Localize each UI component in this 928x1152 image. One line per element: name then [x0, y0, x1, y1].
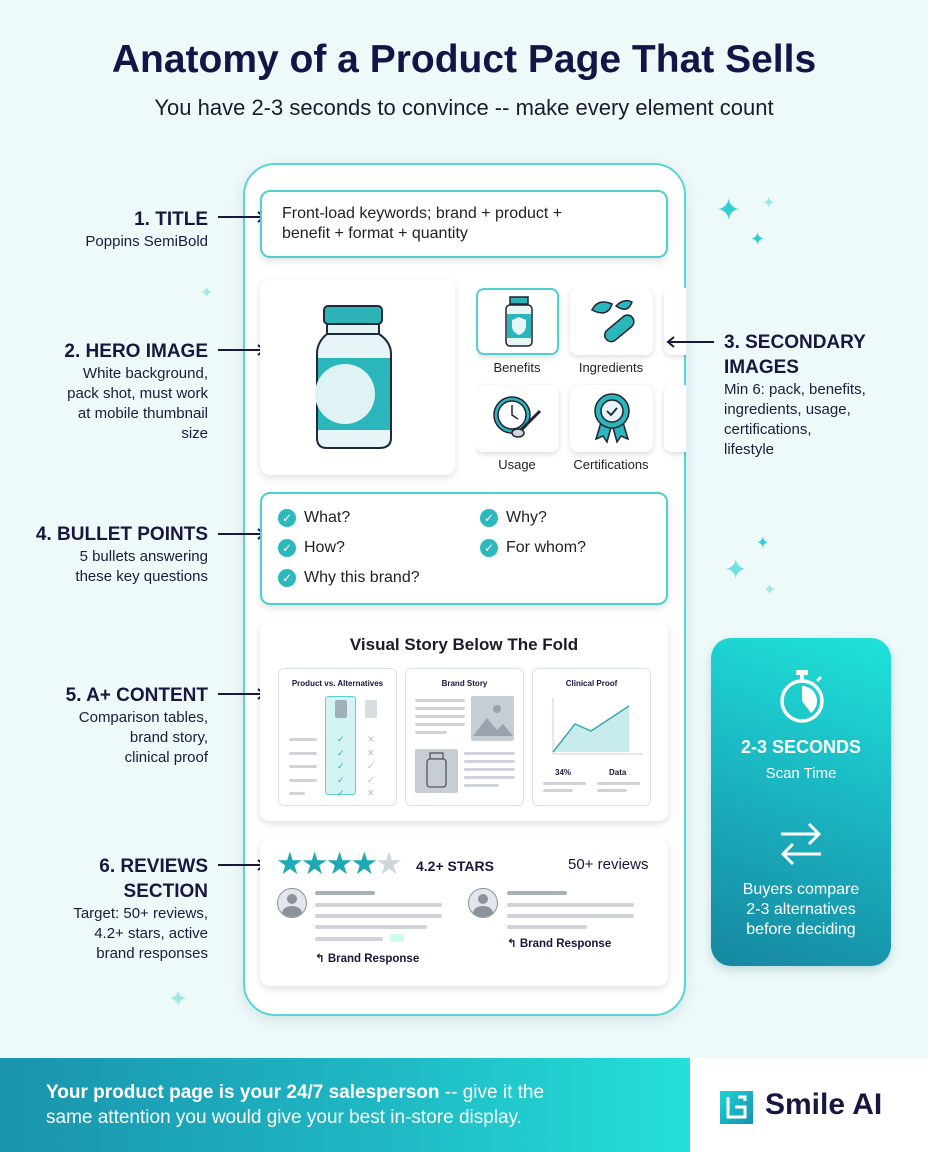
text: ✦: [756, 535, 769, 552]
subcard: clinical proof: 34%: [555, 768, 571, 777]
label: 1. title: 1. TITLE: [134, 209, 208, 230]
subcard: comparison: ✓: [337, 734, 345, 744]
label: 6. reviews: brand responses: [96, 945, 208, 962]
subcard: comparison: ✕: [367, 788, 375, 798]
bullets card: ✓: [282, 571, 292, 585]
label: 2. hero image: White background,: [83, 365, 208, 382]
label: 4. bullet points: 5 bullets answering: [80, 548, 208, 565]
thumb: benefits: [476, 288, 559, 355]
text: ✦: [168, 986, 188, 1013]
subcard: comparison: ✕: [367, 734, 375, 744]
subcard: clinical proof: Data: [609, 768, 626, 777]
title card: Front-load keywords; brand + product + benefit + format + quantity: [282, 205, 562, 242]
bullets card: ✓: [282, 541, 292, 555]
bullets card: ✓: [282, 511, 292, 525]
thumbnails: Ingredients: [579, 360, 643, 375]
footer banner: same attention you would give your best in-store display.: [46, 1107, 522, 1128]
subcard: comparison: ✓: [337, 774, 345, 784]
label: 5. A+ content: clinical proof: [125, 749, 208, 766]
subcard: comparison: ✓: [337, 788, 345, 798]
arrow: hero: [218, 344, 260, 356]
subcard: brand story: Brand Story: [442, 679, 487, 688]
footer banner: Your product page is your 24/7 salesperson -- give it the: [46, 1082, 544, 1103]
review 2: [468, 888, 498, 918]
label: 5. A+ content: Comparison tables,: [79, 709, 208, 726]
bullets card: How?: [304, 539, 345, 556]
text: ✦: [750, 229, 765, 249]
arrow: bullets: [218, 528, 260, 540]
title: Anatomy of a Product Page That Sells: [112, 38, 816, 81]
subcard: comparison: Product vs. Alternatives: [292, 679, 383, 688]
review 1: [277, 888, 307, 918]
bullets card: Why this brand?: [304, 569, 420, 586]
subcard: comparison: ✓: [367, 761, 375, 771]
label: 3. secondary images: 3. SECONDARY: [724, 332, 866, 353]
stat box: Buyers compare: [743, 881, 859, 898]
subcard: clinical proof: Clinical Proof: [566, 679, 617, 688]
bullets card: ✓: [484, 511, 494, 525]
stat box: before deciding: [746, 921, 856, 938]
label: 2. hero image: 2. HERO IMAGE: [64, 341, 208, 362]
text: ✦: [724, 554, 747, 585]
label: 1. title: [85, 209, 208, 250]
logo: [690, 1058, 928, 1152]
arrow: title: [218, 211, 260, 223]
thumb: usage: [476, 385, 559, 452]
title card: [260, 190, 668, 258]
label: 6. reviews: 4.2+ stars, active: [94, 925, 208, 942]
label: 3. secondary images: Min 6: pack, benefits,: [724, 381, 866, 398]
reviews card: [260, 838, 668, 986]
bullets card: For whom?: [506, 539, 586, 556]
logo: Smile AI: [765, 1088, 882, 1121]
label: 5. A+ content: brand story,: [130, 729, 208, 746]
stat box: Scan Time: [766, 765, 836, 782]
label: 6. reviews: Target: 50+ reviews,: [73, 905, 208, 922]
label: 2. hero image: [64, 341, 208, 442]
text: ✦: [762, 195, 775, 212]
subcard: brand story: [405, 668, 524, 806]
label: 1. title: Poppins SemiBold: [85, 233, 208, 250]
label: 3. secondary images: [724, 332, 866, 458]
label: 4. bullet points: these key questions: [75, 568, 208, 585]
subcard: comparison: ✓: [337, 748, 345, 758]
label: 3. secondary images: certifications,: [724, 421, 812, 438]
reviews card: ↰ Brand Response: [507, 938, 611, 950]
decorative sparkles: ✦: [716, 194, 741, 227]
A+ card: Visual Story Below The Fold: [350, 635, 578, 654]
icon: stopwatch: [780, 670, 824, 723]
subtitle: You have 2-3 seconds to convince -- make every element count: [154, 95, 774, 120]
label: 2. hero image: at mobile thumbnail: [78, 405, 208, 422]
label: 2. hero image: pack shot, must work: [67, 385, 208, 402]
subcard: comparison: ✕: [367, 748, 375, 758]
arrow: A+: [218, 688, 260, 700]
stat box: [711, 638, 891, 966]
stat box: 2-3 SECONDS: [741, 737, 861, 757]
label: 3. secondary images: ingredients, usage,: [724, 401, 851, 418]
subcard: comparison: ✓: [337, 761, 345, 771]
label: 5. A+ content: [66, 685, 208, 766]
text: ✦: [200, 285, 213, 302]
stars: ★★★★★: [276, 846, 400, 881]
thumb: partial 2: [664, 385, 747, 452]
thumbnails: Usage: [498, 457, 536, 472]
subcard: comparison: [278, 668, 397, 806]
label: 6. reviews: [73, 856, 208, 962]
thumbnails: Certifications: [573, 457, 649, 472]
arrow: reviews: [218, 859, 260, 871]
reviews card: ↰ Brand Response: [315, 953, 419, 965]
label: 4. bullet points: [36, 524, 208, 585]
bullets card: [260, 492, 668, 605]
thumb: certifications: [570, 385, 653, 452]
bullets card: ✓: [484, 541, 494, 555]
bullets card: Why?: [506, 509, 547, 526]
reviews card: 50+ reviews: [568, 856, 648, 873]
subcard: comparison: ✓: [367, 774, 375, 784]
thumbnails: Benefits: [494, 360, 540, 375]
label: 6. reviews: SECTION: [124, 881, 208, 902]
stat box: 2-3 alternatives: [746, 901, 856, 918]
label: 3. secondary images: lifestyle: [724, 441, 774, 458]
A+ card: [260, 621, 668, 821]
thumb: partial: [664, 288, 747, 355]
footer banner: [0, 1058, 690, 1152]
bullets card: What?: [304, 509, 350, 526]
arrow: secondary: [666, 336, 714, 348]
reviews card: 4.2+ STARS: [416, 858, 494, 874]
hero card: [260, 280, 455, 475]
thumb: ingredients: [570, 288, 653, 355]
label: 5. A+ content: 5. A+ CONTENT: [66, 685, 208, 706]
label: 6. reviews: 6. REVIEWS: [99, 856, 208, 877]
icon: swap arrows: [781, 823, 821, 865]
label: 3. secondary images: IMAGES: [724, 357, 799, 378]
subcard: clinical proof: [532, 668, 651, 806]
text: ✦: [763, 582, 776, 599]
thumbnails: [476, 288, 686, 472]
label: 2. hero image: size: [181, 425, 208, 442]
phone frame: [243, 163, 686, 1016]
label: 4. bullet points: 4. BULLET POINTS: [36, 524, 208, 545]
icon: bottle: [315, 305, 392, 449]
